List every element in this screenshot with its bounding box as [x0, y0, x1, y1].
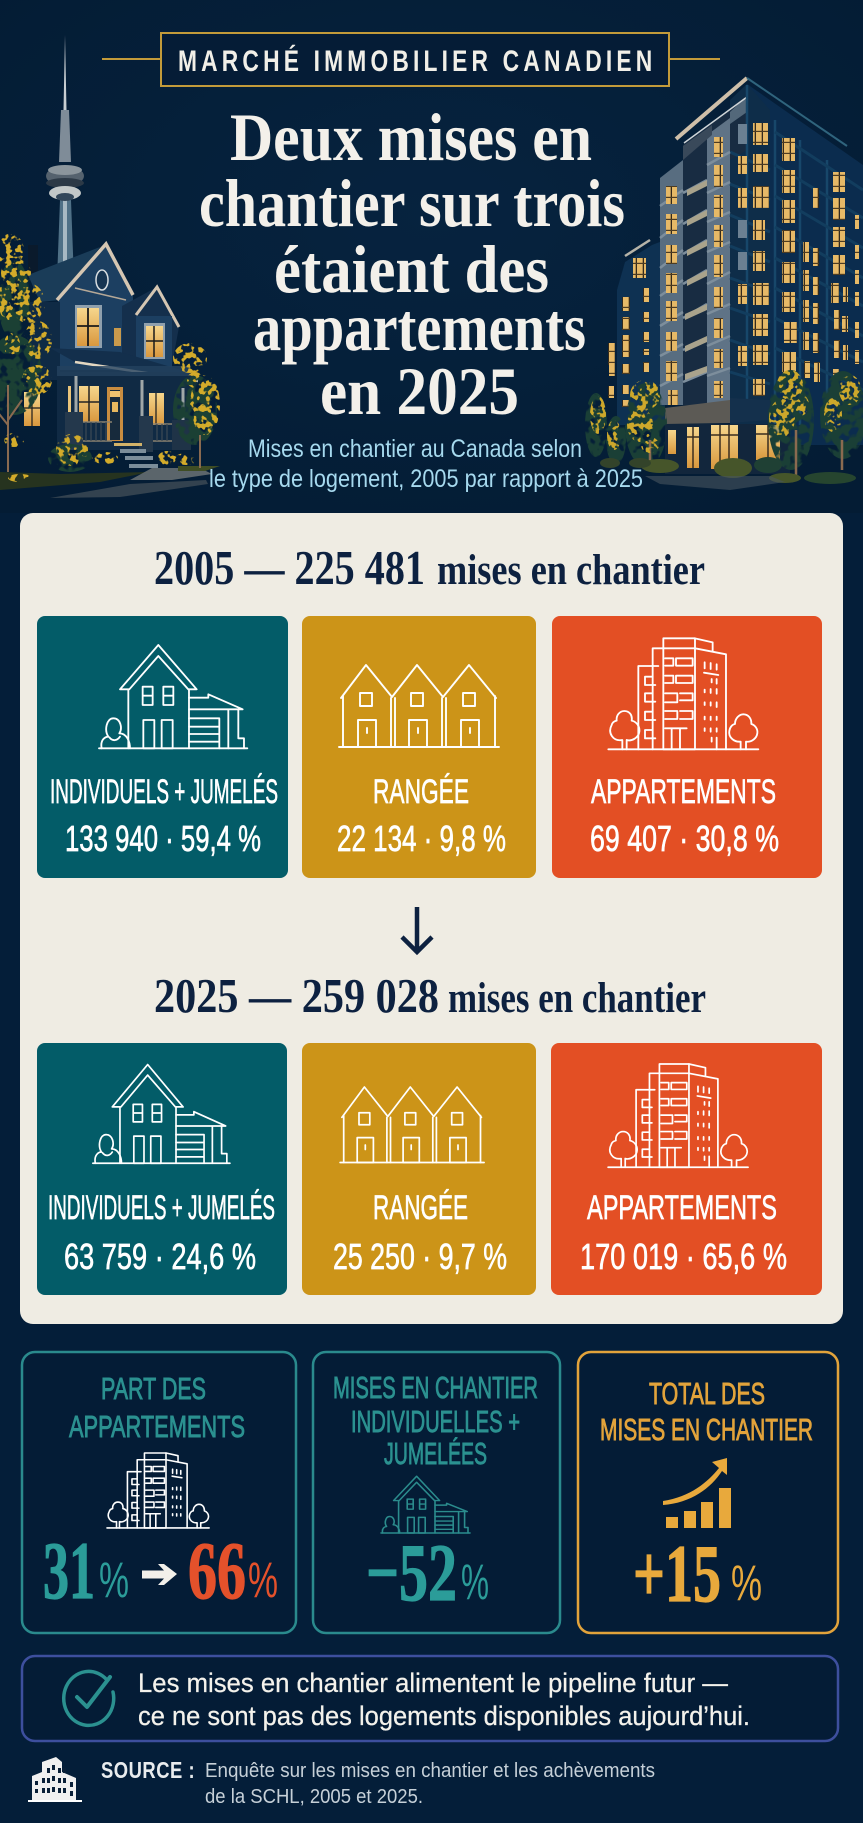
icon: apartment block — [608, 1064, 748, 1167]
subtitle — [209, 435, 643, 493]
illustration: trees and shrubs beside the apartment tower — [585, 370, 863, 484]
subtitle: le type de logement, 2005 par rapport à 2025 — [209, 465, 643, 493]
card: 2005 rangée: 22 134 · 9,8 % — [337, 818, 506, 859]
stat card: part des appartements: APPARTEMENTS — [69, 1409, 245, 1444]
card: 2025 appartements: APPARTEMENTS — [587, 1189, 777, 1227]
stat card: mises en chantier individuelles + jumelées: % — [461, 1554, 489, 1610]
stat card: mises en chantier individuelles + jumelées: INDIVIDUELLES + — [351, 1404, 520, 1439]
stat card: total des mises en chantier: +15 — [633, 1528, 721, 1619]
source note: Enquête sur les mises en chantier et les achèvements — [205, 1760, 655, 1782]
header tag: MARCHÉ IMMOBILIER CANADIEN — [178, 44, 652, 78]
card: 2025 individuels + jumelés: 63 759 · 24,6 % — [64, 1236, 256, 1277]
card: 2025 individuels + jumelés — [37, 1043, 287, 1295]
stat card: part des appartements — [22, 1352, 296, 1633]
icon: source building — [28, 1757, 82, 1802]
card: 2025 rangée: 25 250 · 9,7 % — [333, 1236, 507, 1277]
card: 2025 individuels + jumelés: INDIVIDUELS + JUMELÉS — [48, 1189, 275, 1227]
card: 2005 appartements: 69 407 · 30,8 % — [590, 818, 779, 859]
stat card: part des appartements: % — [99, 1552, 129, 1608]
stat card: part des appartements: 66 — [188, 1525, 246, 1616]
card: 2005 appartements — [552, 616, 822, 878]
arrow: 31% to 66% — [142, 1564, 177, 1585]
lit windows — [608, 123, 859, 407]
stat card: mises en chantier individuelles + jumelées: −52 — [366, 1527, 457, 1618]
icon: house — [381, 1476, 470, 1533]
title — [199, 99, 625, 429]
icon: apartment block — [107, 1453, 209, 1528]
title: chantier sur trois — [199, 165, 625, 241]
panel: comparison 2005 vs 2025 — [20, 513, 843, 1324]
source note: de la SCHL, 2005 et 2025. — [205, 1786, 423, 1808]
card: 2005 rangée: RANGÉE — [373, 773, 469, 811]
illustration: lawn and path under the house — [0, 466, 220, 498]
icon: apartment block — [608, 638, 758, 749]
stat card: mises en chantier individuelles + jumelées: JUMELÉES — [384, 1436, 487, 1471]
title: étaient des — [274, 231, 549, 307]
heading: 2005: 2005 — 225 481 — [154, 540, 425, 595]
stat card: total des mises en chantier: TOTAL DES — [649, 1376, 765, 1411]
heading: 2025: mises en chantier — [448, 975, 706, 1022]
callout: pipeline note: Les mises en chantier alimentent le pipeline futur — — [138, 1668, 728, 1698]
icon: house — [93, 1065, 230, 1163]
stat card: total des mises en chantier: % — [731, 1555, 762, 1611]
title: Deux mises en — [230, 99, 592, 175]
header tag — [102, 33, 720, 86]
illustration: CN tower — [46, 35, 84, 280]
stat card: mises en chantier individuelles + jumelées: MISES EN CHANTIER — [333, 1370, 538, 1405]
title: appartements — [253, 289, 586, 365]
arrow: 2005 to 2025 — [402, 907, 432, 952]
source note — [101, 1758, 655, 1808]
illustration: apartment tower — [608, 78, 863, 445]
illustration: trees beside the house — [0, 234, 220, 482]
icon: townhouses — [340, 1087, 484, 1162]
illustration: apartment ground floor — [665, 398, 790, 474]
illustration: pavement under the apartment tower — [645, 476, 785, 490]
subtitle: Mises en chantier au Canada selon — [248, 435, 582, 463]
stat card: part des appartements: PART DES — [101, 1371, 206, 1406]
card: 2005 individuels + jumelés: 133 940 · 59,4 % — [65, 818, 261, 859]
stat card: total des mises en chantier — [578, 1352, 838, 1633]
heading: 2025 — [154, 968, 706, 1023]
heading: 2005 — [154, 540, 705, 595]
card: 2025 appartements: 170 019 · 65,6 % — [580, 1236, 787, 1277]
source note: SOURCE : — [101, 1758, 195, 1784]
icon: townhouses — [339, 665, 499, 747]
icon: check circle — [64, 1671, 114, 1725]
card: 2025 appartements — [551, 1043, 822, 1295]
heading: 2005: mises en chantier — [437, 547, 705, 594]
card: 2005 appartements: APPARTEMENTS — [591, 773, 776, 811]
card: 2025 rangée — [302, 1043, 536, 1295]
card: 2005 individuels + jumelés — [37, 616, 288, 878]
title: en 2025 — [320, 353, 519, 429]
icon: rising bar chart — [663, 1458, 731, 1528]
stat card: mises en chantier individuelles + jumelées — [313, 1352, 560, 1633]
heading: 2025: 2025 — 259 028 — [154, 968, 439, 1023]
card: 2025 rangée: RANGÉE — [373, 1189, 468, 1227]
card: 2005 rangée — [302, 616, 536, 878]
callout: pipeline note: ce ne sont pas des logements disponibles aujourd’hui. — [138, 1701, 750, 1731]
stat card: part des appartements: 31 — [43, 1525, 95, 1616]
callout: pipeline note — [22, 1656, 838, 1741]
balcony railings — [685, 180, 707, 380]
icon: house — [99, 645, 247, 748]
stat card: part des appartements: % — [248, 1552, 278, 1608]
illustration: Victorian house — [24, 244, 198, 466]
card: 2005 individuels + jumelés: INDIVIDUELS + JUMELÉS — [50, 773, 278, 811]
